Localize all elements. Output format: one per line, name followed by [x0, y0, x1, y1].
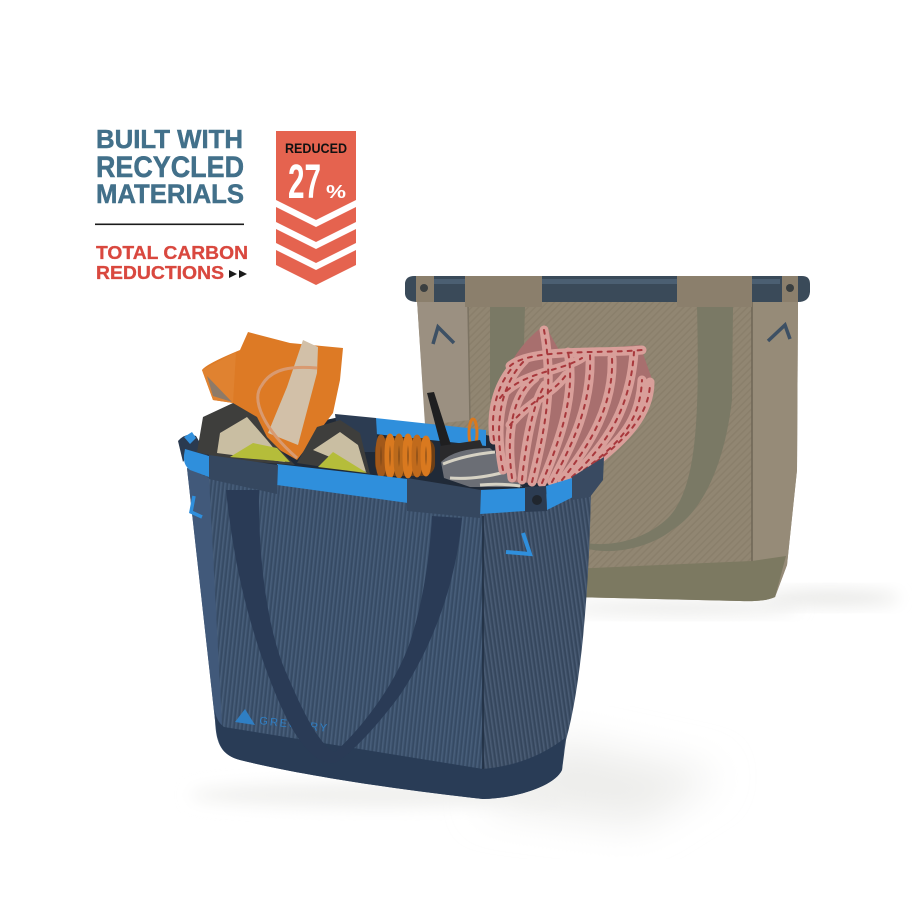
navy bag rim webbing tabs [209, 455, 278, 494]
navy bag right panel [483, 489, 591, 799]
navy tote bag (front) [184, 449, 604, 799]
tan bag left side panel [417, 300, 470, 425]
headline: built with recycled materials [96, 124, 244, 209]
logo: gregory [235, 709, 328, 735]
navy bag blue side loops [506, 533, 530, 554]
navy bag seam [482, 516, 484, 799]
navy bag base band [215, 712, 565, 799]
subheading: total carbon reductions: REDUCTIONS [96, 262, 224, 283]
harness [202, 332, 343, 460]
navy bag front panel [187, 468, 483, 799]
subheading: total carbon reductions: TOTAL CARBON [96, 242, 248, 263]
shadows under bags [190, 591, 900, 825]
tan bag side loops [433, 327, 454, 344]
tan bag navy rim bar [405, 276, 810, 302]
carabiners [375, 419, 477, 476]
climbing gear in bag [197, 325, 654, 487]
badge: reduced 27%: REDUCED [285, 140, 347, 156]
headline: built with recycled materials: RECYCLED [96, 151, 244, 184]
tan bag rim tabs [416, 276, 798, 307]
logo: gregory: GREGORY [259, 715, 328, 735]
tan bag right side panel [752, 300, 798, 600]
tan tote bag (rear) [405, 276, 810, 601]
chalk bag [441, 448, 522, 487]
headline: built with recycled materials: BUILT WITH [96, 124, 243, 154]
coiled rope [490, 325, 654, 484]
rear rim of navy bag [178, 414, 604, 495]
navy bag straps [226, 490, 462, 763]
badge: reduced 27%: 27 [288, 156, 321, 209]
badge: reduced 27%: % [326, 182, 346, 202]
navy bag blue rim [184, 449, 209, 477]
tan bag body [417, 300, 798, 601]
headline: built with recycled materials: MATERIALS [96, 179, 244, 209]
divider rule [95, 224, 244, 225]
tan bag rear straps [490, 307, 525, 400]
navy bag interior [183, 418, 604, 495]
climbing shoe right [297, 420, 370, 474]
navy bag left side panel edge [187, 468, 222, 726]
icon: double arrow [229, 270, 247, 278]
badge: reduced 27% [276, 131, 356, 285]
black tool [427, 392, 451, 450]
climbing shoe left [197, 403, 295, 465]
tan bag olive base band [570, 556, 786, 601]
subheading: total carbon reductions [96, 242, 248, 283]
